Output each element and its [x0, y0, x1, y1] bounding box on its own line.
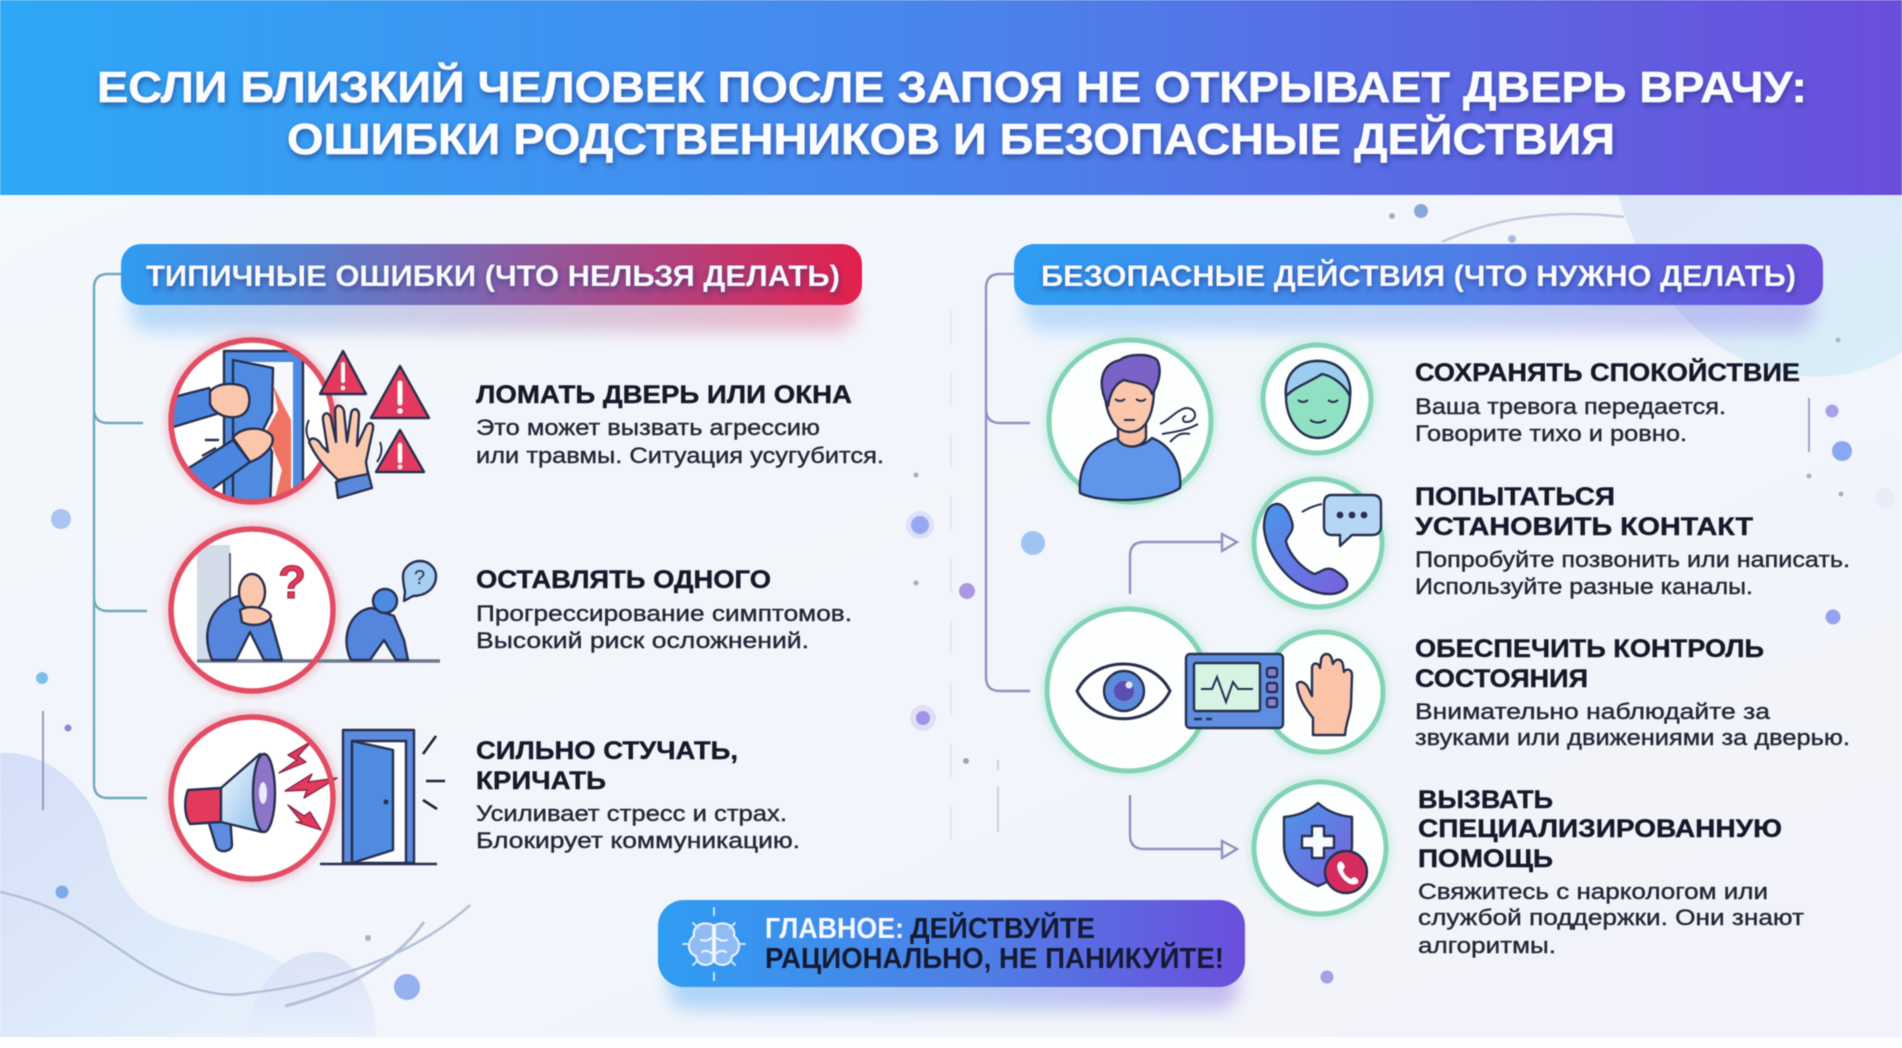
action 1 text: [1415, 357, 1800, 446]
question mark: ?: [278, 556, 306, 608]
mistake 1 text: Это может вызвать агрессию: [476, 415, 820, 440]
action 1 illustration: calm face: [1261, 343, 1373, 455]
mistake 3 text: Блокирует коммуникацию.: [476, 828, 800, 853]
action 2 text: Попробуйте позвонить или написать.: [1415, 547, 1850, 572]
mistake 2 text: Прогрессирование симптомов.: [476, 601, 852, 626]
icon: brain: [683, 908, 745, 980]
action 4 text: ВЫЗВАТЬ: [1418, 786, 1553, 814]
action 2 illustration: phone and chat bubble: [1252, 477, 1384, 609]
action 1 text: СОХРАНЯТЬ СПОКОЙСТВИЕ: [1415, 357, 1800, 387]
left bracket connector: [94, 274, 147, 798]
callout text: [765, 911, 1224, 975]
action 2 text: ПОПЫТАТЬСЯ: [1415, 483, 1615, 511]
mistake 1 text: [476, 381, 884, 468]
mistake 1 text: или травмы. Ситуация усугубится.: [476, 443, 884, 468]
arrow down to help: [1130, 795, 1237, 858]
mistake 3 text: Усиливает стресс и страх.: [476, 801, 787, 826]
arrow up to contact: [1130, 534, 1237, 594]
mistake 2 text: ОСТАВЛЯТЬ ОДНОГО: [476, 566, 771, 594]
action 4 illustration: shield and phone: [1252, 780, 1388, 916]
callout: main advice: [658, 900, 1245, 1010]
action 4 text: Свяжитесь с наркологом или: [1418, 879, 1768, 904]
action 2 text: УСТАНОВИТЬ КОНТАКТ: [1415, 513, 1753, 541]
action 1 illustration: calm breathing person: [1048, 339, 1212, 503]
background blob: top right: [1618, 195, 1902, 377]
action 3 text: СОСТОЯНИЯ: [1415, 665, 1588, 693]
mistake 2 text: Высокий риск осложнений.: [476, 628, 809, 653]
warning triangles: [320, 351, 429, 472]
action 2 text: Используйте разные каналы.: [1415, 574, 1753, 599]
raised hand: [306, 406, 381, 498]
panel heading: typical mistakes: [121, 244, 862, 332]
action 3 text: Внимательно наблюдайте за: [1415, 699, 1771, 724]
right bracket connector: [986, 274, 1030, 691]
callout text: ГЛАВНОЕ:: [765, 913, 904, 945]
action 4 text: ПОМОЩЬ: [1418, 845, 1553, 873]
action 3 text: звуками или движениями за дверью.: [1415, 725, 1850, 750]
mistake 3 illustration: shouting at door: [169, 715, 445, 881]
panel heading: safe actions: БЕЗОПАСНЫЕ ДЕЙСТВИЯ (ЧТО НУЖНО ДЕЛАТЬ): [1041, 259, 1796, 293]
decorative curves and dots: [0, 204, 1895, 1006]
callout text: ДЕЙСТВУЙТЕ: [910, 911, 1095, 945]
title: ЕСЛИ БЛИЗКИЙ ЧЕЛОВЕК ПОСЛЕ ЗАПОЯ НЕ ОТКРЫВАЕТ ДВЕРЬ ВРАЧУ:: [97, 61, 1807, 112]
action 3 text: ОБЕСПЕЧИТЬ КОНТРОЛЬ: [1415, 635, 1764, 663]
mistake 2 illustration: leaving alone: ?: [414, 567, 425, 589]
mistake 2 text: [476, 566, 852, 653]
action 4 text: СПЕЦИАЛИЗИРОВАННУЮ: [1418, 815, 1782, 843]
action 4 text: алгоритмы.: [1418, 933, 1556, 958]
background blob: bottom left: [0, 753, 376, 1037]
header band: [0, 0, 1902, 195]
second sitting person: [347, 608, 408, 660]
action 3 illustration: eye, monitor and hand: [1046, 608, 1385, 772]
action 1 text: Говорите тихо и ровно.: [1415, 421, 1687, 446]
action 2 text: [1415, 483, 1850, 599]
action 3 text: [1415, 635, 1850, 750]
action 1 text: Ваша тревога передается.: [1415, 394, 1726, 419]
title: [97, 61, 1807, 164]
action 4 text: службой поддержки. Они знают: [1418, 905, 1804, 930]
mistake 1 illustration: breaking the door: [169, 338, 429, 512]
hand: [1297, 654, 1352, 735]
title: ОШИБКИ РОДСТВЕННИКОВ И БЕЗОПАСНЫЕ ДЕЙСТВИЯ: [287, 113, 1615, 164]
panel heading: typical mistakes: ТИПИЧНЫЕ ОШИБКИ (ЧТО НЕЛЬЗЯ ДЕЛАТЬ): [146, 260, 840, 293]
bottom white strip: [0, 1037, 1902, 1048]
mistake 3 text: СИЛЬНО СТУЧАТЬ,: [476, 737, 738, 765]
panel heading: safe actions: [1014, 244, 1823, 332]
monitor: [1186, 654, 1283, 728]
mistake 1 text: ЛОМАТЬ ДВЕРЬ ИЛИ ОКНА: [476, 381, 852, 409]
mistake 2 illustration: leaving alone: [169, 527, 440, 693]
action 4 text: [1418, 786, 1804, 958]
mistake 3 text: КРИЧАТЬ: [476, 767, 606, 795]
door: [320, 730, 445, 864]
mistake 3 text: [476, 737, 800, 853]
callout text: РАЦИОНАЛЬНО, НЕ ПАНИКУЙТЕ!: [765, 941, 1224, 975]
eye: [1077, 664, 1170, 719]
